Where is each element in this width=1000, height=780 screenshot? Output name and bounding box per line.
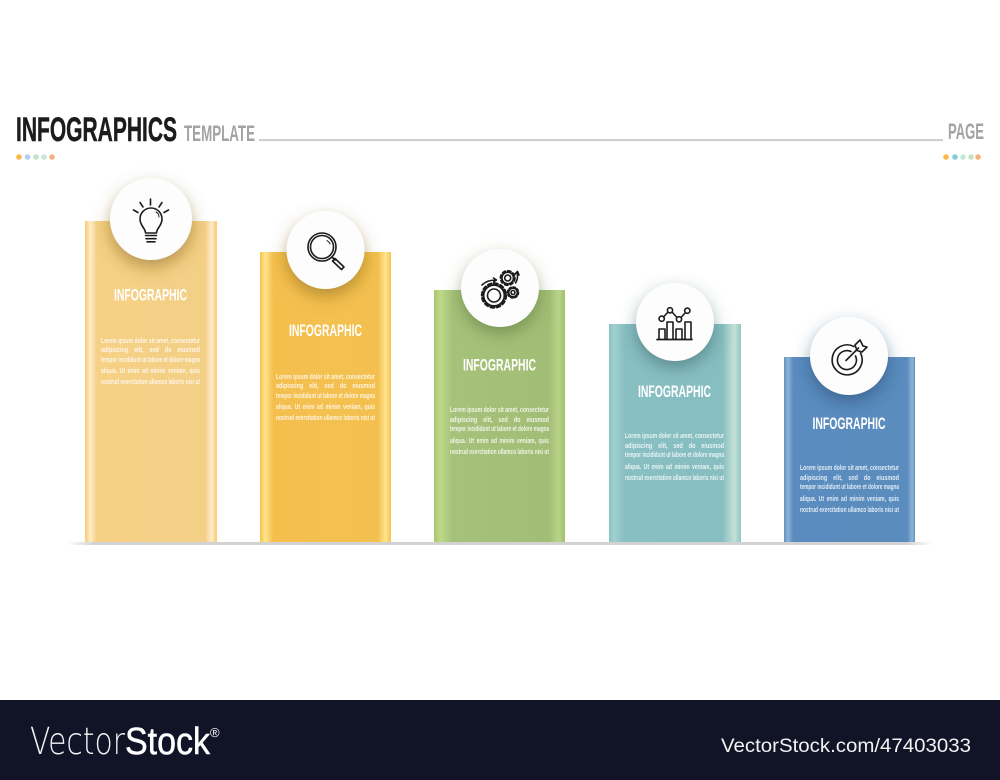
text block 4: [625, 433, 724, 482]
text block 4: adipiscing elit, sed do eiusmod: [625, 443, 724, 450]
footer logo: Stock: [125, 721, 211, 763]
icon: target with arrow: [832, 340, 867, 375]
right colour dots: [943, 154, 981, 160]
text block 4: nostrud exercitation ullamco laboris nisi ut: [625, 475, 724, 482]
text block 1: adipiscing elit, sed do eiusmod: [101, 347, 200, 354]
footer url: VectorStock.com/47403033: [721, 736, 971, 757]
text block 2: aliqua. Ut enim ad minim veniam, quis: [276, 404, 375, 411]
icon: bar and line chart: [657, 308, 692, 340]
icon circle 5: [810, 317, 888, 395]
registered mark: ®: [210, 725, 220, 740]
left colour dots: [16, 154, 55, 160]
icon circle 3: [461, 249, 539, 327]
text block 5: Lorem ipsum dolor sit amet, consectetur: [800, 465, 899, 472]
text block 3: adipiscing elit, sed do eiusmod: [450, 417, 549, 424]
text block 3: Lorem ipsum dolor sit amet, consectetur: [450, 407, 549, 414]
text block 1: aliqua. Ut enim ad minim veniam, quis: [101, 368, 200, 375]
text block 2: tempor incididunt ut labore et dolore magna: [276, 393, 375, 400]
panel: column 5: [784, 317, 915, 542]
bar 5: [784, 357, 915, 542]
panel: column 3: [434, 249, 565, 542]
panel: column 4: [609, 283, 741, 542]
icon circle 2: [286, 211, 364, 289]
icon circle 4: [636, 283, 714, 361]
icon: light bulb: [134, 199, 168, 242]
text block 1: [101, 338, 200, 386]
title: INFOGRAPHICS: [16, 111, 177, 149]
text block 4: aliqua. Ut enim ad minim veniam, quis: [625, 464, 724, 471]
text block 2: adipiscing elit, sed do eiusmod: [276, 383, 375, 390]
text block 1: nostrud exercitation ullamco laboris nisi ut: [101, 379, 200, 386]
panel: column 1: [85, 178, 217, 542]
icon circle 1: [110, 178, 192, 260]
footer logo: Vector: [30, 720, 126, 763]
text block 3: aliqua. Ut enim ad minim veniam, quis: [450, 438, 549, 445]
text block 3: [450, 407, 549, 456]
bar 4: [609, 324, 741, 542]
bar 3: [434, 290, 565, 542]
text block 5: [800, 465, 899, 514]
heading 4: INFOGRAPHIC: [638, 382, 711, 401]
text block 1: tempor incididunt ut labore et dolore magna: [101, 357, 200, 364]
bar 1: [85, 221, 217, 542]
text block 2: nostrud exercitation ullamco laboris nisi ut: [276, 415, 375, 422]
text block 1: Lorem ipsum dolor sit amet, consectetur: [101, 338, 200, 345]
icon: magnifying glass: [308, 233, 344, 270]
subtitle: TEMPLATE: [184, 121, 255, 146]
text block 3: nostrud exercitation ullamco laboris nisi ut: [450, 449, 549, 456]
bar 2: [260, 252, 391, 542]
text block 4: tempor incididunt ut labore et dolore magna: [625, 452, 724, 459]
heading 1: INFOGRAPHIC: [114, 286, 187, 304]
text block 3: tempor incididunt ut labore et dolore magna: [450, 426, 549, 433]
panel: column 2: [260, 211, 391, 542]
baseline shadow: [68, 542, 932, 545]
heading 5: INFOGRAPHIC: [812, 414, 886, 433]
text block 5: aliqua. Ut enim ad minim veniam, quis: [800, 496, 899, 503]
heading 3: INFOGRAPHIC: [463, 356, 536, 374]
text block 5: nostrud exercitation ullamco laboris nisi ut: [800, 507, 899, 514]
text block 5: tempor incididunt ut labore et dolore magna: [800, 484, 899, 491]
text block 2: Lorem ipsum dolor sit amet, consectetur: [276, 374, 375, 381]
text block 2: [276, 374, 375, 422]
icon: gears: [482, 271, 519, 307]
heading 2: INFOGRAPHIC: [289, 321, 362, 340]
text block 5: adipiscing elit, sed do eiusmod: [800, 475, 899, 482]
text block 4: Lorem ipsum dolor sit amet, consectetur: [625, 433, 724, 440]
footer band: [0, 700, 1000, 780]
footer logo: [30, 720, 211, 763]
